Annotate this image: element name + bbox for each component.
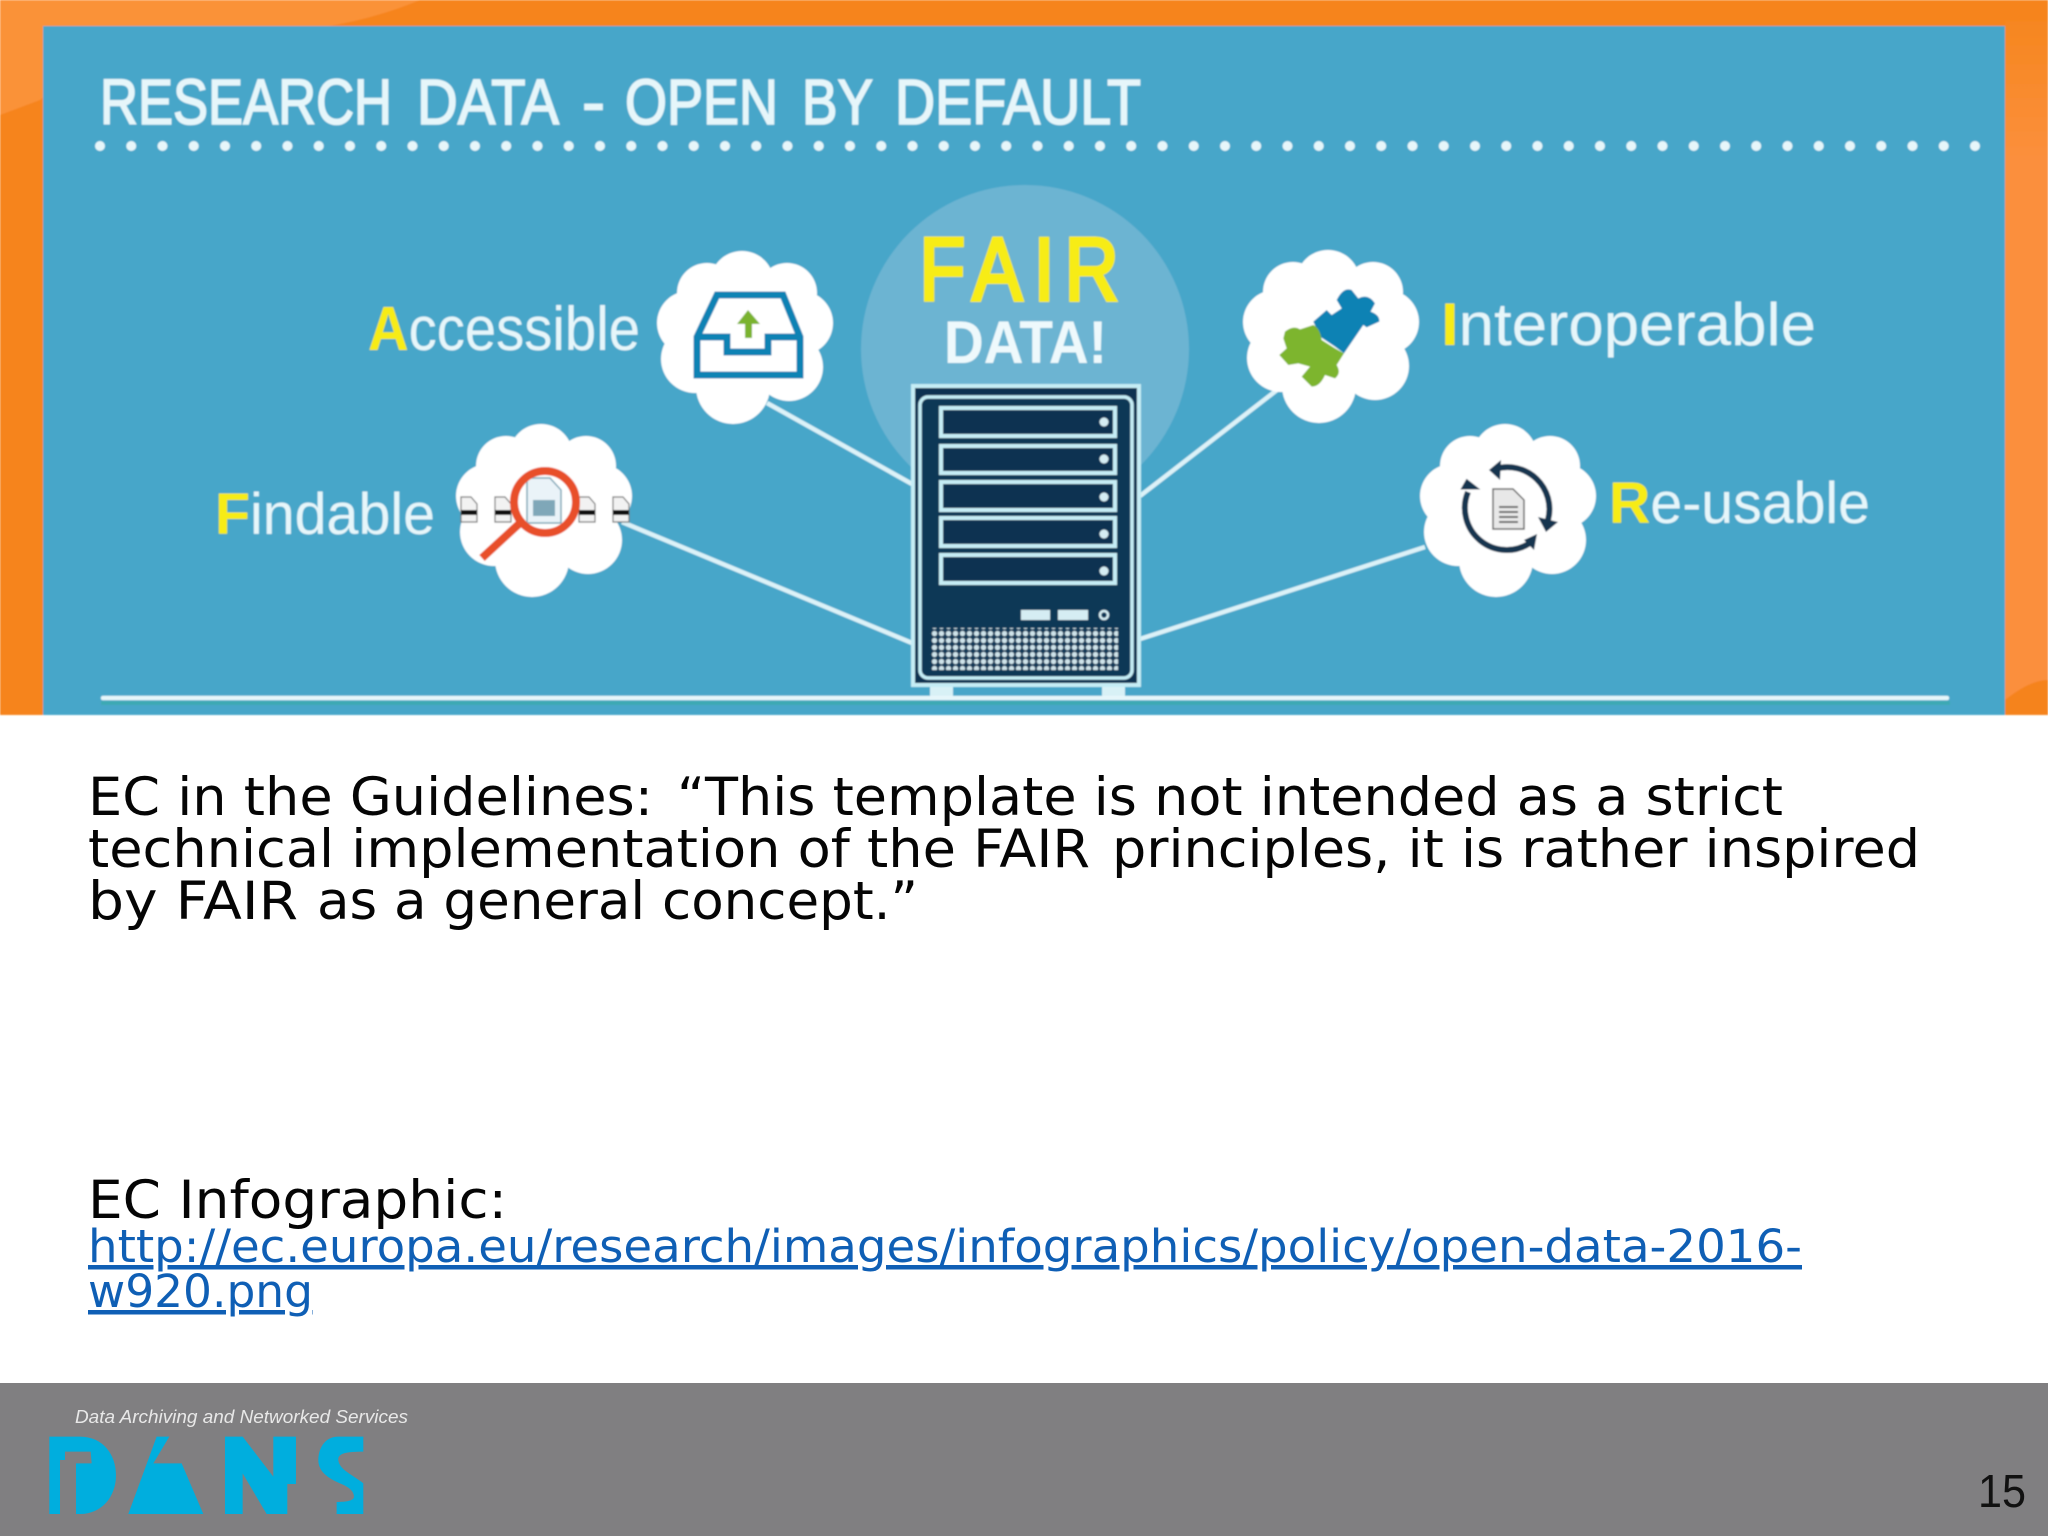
- banner title: RESEARCH: [100, 66, 392, 138]
- footer tagline: Data Archiving and Networked Services: [75, 1407, 408, 1427]
- base line: [101, 698, 1950, 705]
- banner title: BY: [802, 66, 873, 138]
- Interoperable label: Interoperable: [1441, 291, 1816, 358]
- DANS logo: [49, 1437, 363, 1514]
- glow circle behind FAIR DATA: [861, 185, 1189, 513]
- footer bar: [0, 1383, 2048, 1536]
- banner title: [100, 66, 1141, 138]
- Accessible cloud and inbox icon: [657, 251, 833, 424]
- DATA heading: DATA!: [944, 309, 1107, 376]
- source link: w920.png: [88, 1265, 313, 1318]
- Accessible label: Accessible: [368, 295, 640, 364]
- blue panel: [43, 26, 2005, 715]
- quote text block: principles, it is rather inspired: [1112, 819, 1920, 880]
- Re-usable cloud and cycle icon: [1420, 424, 1596, 597]
- quote text block: “This template is not intended as a strict: [677, 767, 1783, 828]
- quote text block: by FAIR: [88, 871, 298, 932]
- banner title: OPEN: [625, 66, 778, 138]
- EC Infographic heading: EC Infographic:: [88, 1170, 507, 1231]
- banner: FAIR data image: [0, 0, 2048, 715]
- banner title: DATA: [417, 66, 559, 138]
- FAIR heading: FAIR: [919, 221, 1119, 319]
- server: [913, 386, 1139, 697]
- banner title: DEFAULT: [895, 66, 1141, 138]
- orange frame: [0, 0, 2048, 715]
- Findable label: Findable: [215, 482, 435, 547]
- banner title: -: [582, 66, 605, 138]
- Findable cloud and magnifier icon: [456, 424, 632, 597]
- Re-usable label: Re-usable: [1609, 471, 1870, 536]
- quote text block: [88, 767, 1920, 932]
- Interoperable cloud and puzzle icon: [1243, 250, 1419, 423]
- quote text block: as a general concept.”: [317, 871, 918, 932]
- page number: 15: [1978, 1465, 2026, 1517]
- source link: [88, 1220, 1802, 1318]
- source link: http://ec.europa.eu/research/images/infographics/policy/open-data-2016-: [88, 1220, 1802, 1273]
- quote text block: technical implementation of the FAIR: [88, 819, 1090, 880]
- quote text block: EC in the Guidelines:: [88, 767, 653, 828]
- connector lines: [622, 390, 1425, 643]
